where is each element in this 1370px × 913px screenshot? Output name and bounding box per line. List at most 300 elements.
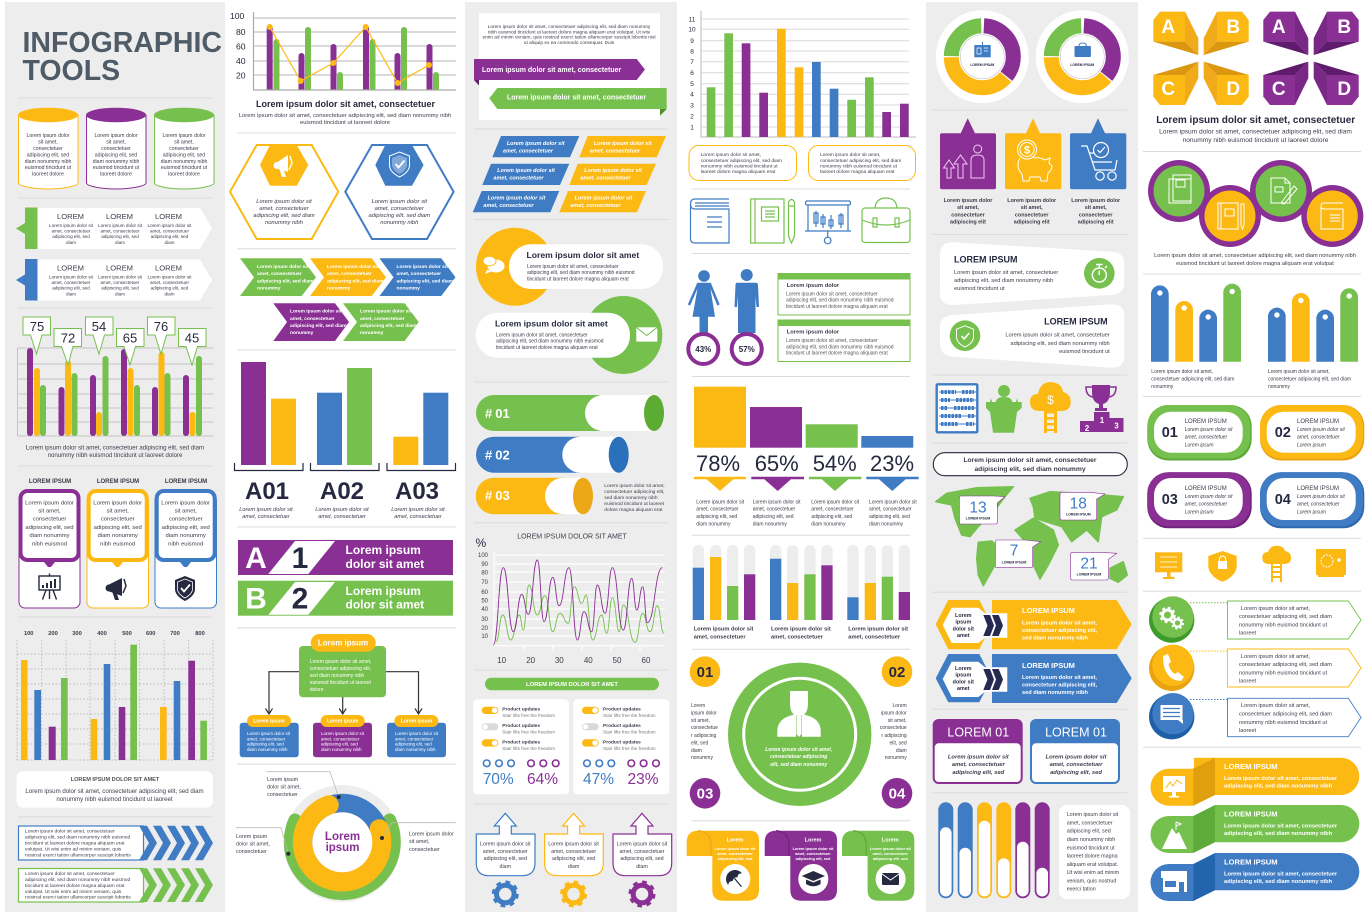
chevron process: adipiscing elit, sed diam xyxy=(257,278,314,284)
toggle card 1: Product updates xyxy=(502,723,540,729)
title cards: Lorem ipsum dolor sit xyxy=(1046,754,1108,760)
speech cards: diam nonummy xyxy=(98,533,138,539)
hex arrow: blue: sed diam nonummy nibh xyxy=(1022,690,1088,696)
chevron process: nonummy xyxy=(327,286,351,292)
donut chart: consectetuer xyxy=(409,847,440,853)
icon: monitor chart xyxy=(1163,776,1185,798)
title cards: LOREM 01 xyxy=(1045,726,1107,740)
bubble card: green: Lorem ipsum dolor sit amet xyxy=(495,318,608,328)
circle note: chat xyxy=(1149,693,1361,739)
line chart: 70 xyxy=(481,580,489,586)
combo chart: 60 xyxy=(236,42,246,52)
arrow banner: green: amet, consectetuer xyxy=(150,229,189,234)
step bars with percentages: amet, consectetuer xyxy=(869,507,912,513)
circle note: chat: nonummy nibh euismod tincidunt ut xyxy=(1239,720,1327,726)
cylinders: euismod tincidunt ut xyxy=(25,165,72,171)
gauge note: Lorem ipsum dolor sit xyxy=(1067,812,1119,818)
line chart: 50 xyxy=(613,656,622,665)
icon: book xyxy=(690,199,729,243)
parallelogram tags: Lorem ipsum dolor sit xyxy=(488,196,547,202)
hex arrow: yellow: amet xyxy=(957,633,970,639)
org chart xyxy=(240,634,446,757)
title cards xyxy=(933,719,1120,784)
circle note: gears: nonummy nibh euismod tincidunt ut xyxy=(1239,622,1327,628)
folded card: yellow: Lorem ipsum dolor sit xyxy=(715,846,756,851)
speech cards: Lorem ipsum dolor xyxy=(25,500,74,506)
ribbon: green: Lorem ipsum dolor sit amet, consectetuer xyxy=(1224,823,1338,829)
hex arrow: blue xyxy=(936,654,1132,703)
step bars with percentages: Lorem ipsum dolor sit xyxy=(696,500,745,506)
org chart: Lorem ipsum dolor sit xyxy=(321,731,365,736)
toggle card 2: Product updates xyxy=(603,739,641,745)
ribbon intro card: Lorem ipsum dolor sit amet, consectetuer xyxy=(482,67,622,74)
bubble card: green: adipiscing elit, sed diam nonummy nibh euismod xyxy=(496,339,604,345)
arrow banner: blue: LOREM xyxy=(57,264,84,272)
speech cards: nibh euismod xyxy=(168,541,203,547)
chevron process: amet, consectetuer xyxy=(257,271,302,277)
speech cards: sit amet, xyxy=(107,508,129,514)
description: nonummy nibh euismod tincidunt ut laoreet dolore xyxy=(1183,137,1329,144)
cylinders: euismod tincidunt ut xyxy=(93,165,140,171)
folded card: purple xyxy=(765,831,837,901)
banner B2: B xyxy=(245,583,267,616)
cylinders: adipiscing elit, sed xyxy=(95,152,137,158)
world map xyxy=(936,487,1127,586)
parallelogram tags: amet, consectetuer xyxy=(590,148,641,154)
bar chart 1-11: 5 xyxy=(690,81,694,88)
icon: trophy podium: 2 xyxy=(1085,424,1090,433)
numbered pills: Lorem ipsum dolor sit xyxy=(1185,494,1233,500)
central person graphic: 04 xyxy=(889,786,906,803)
central person graphic xyxy=(690,656,912,809)
circle note: chat: Lorem ipsum dolor sit amet, xyxy=(1241,703,1310,709)
icon: shield lock xyxy=(1208,551,1237,582)
combo chart: 80 xyxy=(236,27,246,37)
step bars with percentages: diam nonummy xyxy=(753,521,787,527)
speech cards: sit amet, xyxy=(38,508,61,514)
info boxes: Lorem ipsum dolor xyxy=(787,330,840,336)
pin bars: nonummy xyxy=(1268,384,1290,390)
numbered pills: Lorem ipsum xyxy=(1297,510,1326,516)
central person graphic: Lorem xyxy=(893,703,907,709)
info boxes: Lorem ipsum dolor xyxy=(787,283,840,289)
people stats: 57% xyxy=(739,345,755,354)
hexagon: yellow: Lorem ipsum dolor sit xyxy=(256,199,312,205)
combo chart: 20 xyxy=(236,70,246,80)
circle note: gears: consectetuer adipiscing elit, sed diam xyxy=(1239,614,1332,620)
hex arrow: blue: Lorem ipsum dolor sit amet, xyxy=(1022,675,1097,681)
gauge note: Ut wisi enim ad minim xyxy=(1067,870,1120,876)
central person graphic: elit, sed xyxy=(889,740,907,746)
ribbon: yellow xyxy=(1150,757,1359,806)
progress bars xyxy=(693,545,910,641)
folded card: purple: amet, consectetuer xyxy=(795,851,831,856)
numbered pills: 01 xyxy=(1162,425,1178,441)
banner B2: Lorem ipsum xyxy=(346,584,421,598)
speech cards: adipiscing elit, sed xyxy=(25,525,74,531)
central person graphic: Lorem xyxy=(691,703,705,709)
line chart: 10 xyxy=(497,656,507,665)
dotted bar chart 100-800: 400 xyxy=(97,631,107,637)
central person graphic: nonummy xyxy=(691,755,713,761)
note: stopwatch: LOREM IPSUM xyxy=(954,254,1018,264)
numbered pills: 04 xyxy=(1275,492,1291,508)
line chart: 80 xyxy=(481,570,489,576)
progress bars: amet, consectetuer xyxy=(694,635,746,641)
donut 1: LOREM IPSUM xyxy=(970,63,994,67)
org chart: amet, consectetuer xyxy=(247,736,286,741)
arrow banner: green: adipiscing elit, sed xyxy=(151,234,189,239)
parallelogram tags: amet, consectetuer xyxy=(570,203,621,209)
step bars with percentages: adipiscing elit, sed xyxy=(869,514,910,520)
step bars with percentages: adipiscing elit, sed xyxy=(753,514,794,520)
info boxes: tincidunt ut laoreet dolore magna aliquam erat xyxy=(786,351,888,357)
gauge note: adipiscing elit, sed xyxy=(1067,828,1111,834)
cylinders: consectetuer xyxy=(33,146,63,152)
donut chart: Lorem ipsum dolor xyxy=(409,832,454,838)
outline pill heading xyxy=(933,453,1127,476)
icon tiles: sit amet, xyxy=(1021,205,1043,211)
speech cards: LOREM IPSUM xyxy=(165,479,207,485)
icon: trophy podium xyxy=(1080,385,1124,433)
note: shield xyxy=(940,304,1124,368)
gauge note xyxy=(1059,805,1130,899)
ABCD purple: A xyxy=(1272,17,1286,38)
cylinders 01 02 03: # xyxy=(485,488,493,503)
panel: column 2 xyxy=(230,11,456,902)
bar chart with value callouts: 76 xyxy=(154,319,168,334)
gauge note: veniam, quis nostrud xyxy=(1067,878,1116,884)
central person graphic: consectetuer adipiscing xyxy=(770,754,827,760)
central person graphic: sit amet, xyxy=(888,718,907,724)
org chart: consectetuer adipiscing elit, xyxy=(310,666,371,672)
description: Lorem ipsum dolor sit amet, consectetuer adipiscing elit, sed diam xyxy=(1159,128,1352,136)
toggle card 2: Product updates xyxy=(603,706,641,712)
pin bars: nonummy xyxy=(1151,384,1174,390)
note boxes: Lorem ipsum dolor sit amet, xyxy=(820,152,880,158)
icon: umbrella xyxy=(722,866,748,892)
donut chart: ipsum xyxy=(326,842,359,854)
arrow cards with gears: amet, consectetuer xyxy=(619,849,665,855)
grouped bars A01 A02 A03: Lorem ipsum dolor sit xyxy=(391,507,445,513)
arrow cards with gears: amet, consectetuer xyxy=(483,849,528,855)
folded card: green: amet, consectetuer xyxy=(873,851,909,856)
bubble card: green xyxy=(476,296,662,374)
toggle card 1: Product updates xyxy=(502,739,540,745)
icon tiles: consectetuer xyxy=(1079,212,1113,218)
step bars with percentages: 23% xyxy=(870,451,914,476)
chevron box: blue: nostrud exerci tation ullamcorper suscipit lobortis xyxy=(25,852,131,858)
toggle card 1: Stair lifts free the freedom xyxy=(502,713,555,718)
icon tiles: Lorem ipsum dolor xyxy=(1071,198,1121,204)
hex arrow: blue: ipsum xyxy=(955,673,971,679)
icon: mountain flag xyxy=(1162,822,1187,849)
icon: presentation chart xyxy=(805,201,851,244)
donut chart: dolor sit amet, xyxy=(236,842,270,848)
circle note: phone xyxy=(1149,645,1361,691)
icon tiles xyxy=(940,118,1126,226)
arrow banner: blue: amet, consectetuer xyxy=(150,280,189,285)
combo chart xyxy=(230,11,456,90)
arrow banner: green: adipiscing elit, sed xyxy=(52,234,90,239)
note: stopwatch: Lorem ipsum dolor sit amet, consectetuer xyxy=(954,270,1058,276)
banner A1: Lorem ipsum xyxy=(346,543,421,557)
icon: megaphone xyxy=(106,578,126,600)
chart note: nonummy nibh euismod tincidunt ut laoreet xyxy=(56,796,173,803)
chart caption: nonummy nibh euismod tincidunt ut laoreet dolore xyxy=(48,452,183,459)
chevron box: blue xyxy=(18,826,213,860)
world map: 13 xyxy=(969,500,987,516)
line chart: 90 xyxy=(481,562,489,568)
dotted bar chart 100-800: 200 xyxy=(48,631,58,637)
grouped bars A01 A02 A03: amet, consectetuer xyxy=(318,514,367,520)
numbered pills: Lorem ipsum dolor sit xyxy=(1297,494,1345,500)
arrow banner: blue: adipiscing elit, sed xyxy=(151,286,189,290)
icon: growth person xyxy=(944,145,984,178)
bubble card: yellow: tincidunt ut laoreet dolore magna aliquam erat xyxy=(527,276,629,282)
note: stopwatch: euismod tincidunt ut xyxy=(954,286,1005,292)
cylinders: euismod tincidunt ut xyxy=(161,165,208,171)
heading: Lorem ipsum dolor sit amet, consectetuer xyxy=(256,99,436,109)
ribbon intro card: enim ad minim veniam, quis nostrud exerci tation ullamcorper suscipit lobortis nisl xyxy=(482,34,656,40)
world map: 7 xyxy=(1010,542,1018,560)
arrow banner: green: LOREM xyxy=(57,212,84,221)
description: Lorem ipsum dolor sit amet, consectetuer adipiscing elit, sed diam nonummy nibh xyxy=(239,113,451,119)
progress bars: Lorem ipsum dolor sit xyxy=(848,626,908,632)
step bars with percentages: diam nonummy xyxy=(811,521,846,527)
speech cards: LOREM IPSUM xyxy=(29,479,71,485)
chevron process: nonummy xyxy=(396,286,420,292)
cylinders 01 02 03: 02 xyxy=(495,448,510,462)
world map: LOREM IPSUM xyxy=(1077,572,1101,576)
folded card: purple: Lorem ipsum dolor sit xyxy=(793,846,834,851)
ribbon: yellow: LOREM IPSUM xyxy=(1224,762,1278,771)
chevron box: blue: tincidunt ut laoreet dolore magna aliquam erat xyxy=(25,840,125,846)
central person graphic: ipsum dolor xyxy=(881,710,907,716)
note: stopwatch: adipiscing elit, sed diam nonummy nibh xyxy=(954,278,1053,284)
cylinders: Lorem ipsum dolor xyxy=(95,133,138,139)
line chart: 20 xyxy=(481,626,489,632)
grouped bars A01 A02 A03: amet, consectetuer xyxy=(242,514,291,520)
org chart: adipiscing elit, sed xyxy=(247,742,284,746)
step bars with percentages: 78% xyxy=(696,451,740,476)
cylinders: sit amet, xyxy=(106,140,126,146)
donut chart: dolor sit amet, xyxy=(267,784,301,790)
arrow cards with gears xyxy=(476,813,672,905)
arrow banner: blue: adipiscing elit, sed xyxy=(52,286,90,290)
org chart: sed diam nonummy nibh xyxy=(310,673,364,679)
bubble card: yellow: adipiscing elit, sed diam nonummy nibh euismod xyxy=(527,270,635,276)
note boxes xyxy=(689,146,916,180)
chevron process: nonummy xyxy=(257,286,281,292)
ABCD yellow xyxy=(1153,12,1249,105)
circle note: chat: laoreet xyxy=(1239,728,1257,734)
note: shield: Lorem ipsum dolor sit amet, consectetuer xyxy=(1005,332,1110,338)
step bars with percentages: diam nonummy xyxy=(696,521,731,527)
chart note: LOREM IPSUM DOLOR SIT AMET xyxy=(71,777,160,783)
hex arrow: yellow: sed diam nonummy nibh xyxy=(1022,635,1088,641)
hexagon: blue: nonummy nibh xyxy=(380,220,418,226)
green header pill: LOREM IPSUM DOLOR SIT AMET xyxy=(526,682,618,688)
step bars with percentages: adipiscing elit, sed xyxy=(696,514,737,520)
step bars with percentages: 65% xyxy=(755,451,799,476)
numbered pills: LOREM IPSUM xyxy=(1185,419,1227,425)
cylinders 01 02 03: Lorem ipsum dolor sit amet, xyxy=(604,483,665,489)
bar chart 1-11: 1 xyxy=(690,124,694,131)
world map: 18 xyxy=(1070,496,1087,512)
org chart: adipiscing elit, sed xyxy=(395,742,432,746)
hex arrow: yellow: Lorem ipsum dolor sit amet, xyxy=(1022,620,1097,626)
combo chart: 40 xyxy=(236,56,246,66)
speech cards: adipiscing elit, sed xyxy=(94,525,142,531)
ribbon: yellow: Lorem ipsum dolor sit amet, consectetuer xyxy=(1224,776,1338,782)
arrow cards with gears: adipiscing elit, sed xyxy=(552,856,595,862)
ribbon: blue: adipiscing elit, sed diam nonummy nibh xyxy=(1224,879,1333,885)
note boxes: nonummy nibh euismod tincidunt ut xyxy=(820,164,898,170)
folded card: yellow: amet, consectetuer xyxy=(717,851,753,856)
numbered pills: 02 xyxy=(1275,425,1291,441)
info boxes: adipiscing elit, sed diam nonummy nibh euismod xyxy=(786,344,894,350)
cylinders: sit amet, xyxy=(38,140,58,146)
gauge note: aliquam erat volutpat. xyxy=(1067,862,1118,868)
bar chart 1-11: 8 xyxy=(690,48,694,55)
toggle card 2: Stair lifts free the freedom xyxy=(603,730,656,734)
arrow banner: green: LOREM xyxy=(106,212,133,221)
chart note: Lorem ipsum dolor sit amet, consectetuer adipiscing elit, sed diam xyxy=(25,788,204,795)
numbered pills: amet, consectetuer xyxy=(1297,435,1340,441)
dotted bar chart 100-800: 600 xyxy=(146,631,155,637)
icon: cloud ladder xyxy=(1030,382,1071,433)
note boxes: consectetuer adipiscing elit, sed diam xyxy=(701,158,782,164)
org chart: Lorem ipsum xyxy=(253,718,285,724)
numbered pills: Lorem ipsum xyxy=(1297,442,1326,448)
numbered pills: Lorem ipsum dolor sit xyxy=(1185,427,1233,433)
chevron box: green: nostrud exerci tation ullamcorper suscipit lobortis xyxy=(25,894,131,900)
folded card: green xyxy=(842,831,914,901)
pin bars: consectetuer adipiscing elit, sed diam xyxy=(1151,376,1234,382)
parallelogram tags: amet, consectetuer xyxy=(580,176,631,182)
gauge note: diam nonummy nibh xyxy=(1067,837,1115,843)
central person graphic: nonummy xyxy=(885,755,907,761)
arrow banner: blue: Lorem ipsum dolor sit xyxy=(98,274,143,280)
cylinders: diam nonummy nibh xyxy=(25,159,71,165)
cylinders 01 02 03: # xyxy=(485,406,493,421)
chevron process: Lorem ipsum dolor sit xyxy=(327,264,379,270)
central person graphic: 03 xyxy=(697,786,713,803)
arrow cards with gears: diam xyxy=(636,864,648,870)
bubble card: green: tincidunt ut laoreet dolore magna aliquam erat xyxy=(496,345,598,351)
banner A1 xyxy=(238,540,453,575)
arrow banner: green: adipiscing elit, sed xyxy=(101,234,139,239)
central person graphic: elit, sed xyxy=(691,740,708,746)
chevron box: green: adipiscing elit, sed diam nonummy nibh euismod xyxy=(25,877,130,883)
org chart: Lorem ipsum xyxy=(401,718,433,724)
numbered pills: amet, consectetuer xyxy=(1185,435,1228,441)
gauge note: amet, consectetuer xyxy=(1067,820,1113,826)
arrow banner: green xyxy=(16,208,212,249)
numbered pills: Lorem ipsum xyxy=(1185,510,1214,516)
hexagon: yellow xyxy=(230,145,338,239)
panel: column 5 xyxy=(926,2,1138,912)
cylinders: Lorem ipsum dolor xyxy=(163,133,206,139)
cylinders 01 02 03: 03 xyxy=(495,488,510,503)
arrow banner: blue xyxy=(16,259,212,300)
step bars with percentages: Lorem ipsum dolor sit xyxy=(753,500,801,506)
speech cards: consectetuer xyxy=(101,517,135,523)
arrow cards with gears: diam xyxy=(500,864,512,870)
people stats: 43% xyxy=(695,345,711,354)
bubble card: green: Lorem ipsum dolor sit amet, consectetuer xyxy=(496,332,588,338)
icon: megaphone xyxy=(274,155,292,177)
ABCD purple: B xyxy=(1337,17,1351,38)
bubble card: yellow: Lorem ipsum dolor sit amet xyxy=(526,250,639,260)
toggle card 2: 47% xyxy=(583,771,614,788)
progress bars: amet, consectetuer xyxy=(848,635,901,641)
pin bars xyxy=(1151,284,1358,390)
speech cards: nibh euismod xyxy=(100,541,135,547)
chevron box: green: Lorem ipsum dolor sit amet, consectetuer xyxy=(25,871,115,877)
line chart: 40 xyxy=(584,656,593,665)
outline pill heading: adipiscing elit, sed diam nonummy xyxy=(974,466,1086,473)
central person graphic: Lorem ipsum dolor sit amet, xyxy=(765,747,832,753)
hexagon: blue xyxy=(345,145,454,239)
chevron process: amet, consectetuer xyxy=(360,316,405,322)
ribbon: green: adipiscing elit, sed diam nonummy nibh xyxy=(1224,831,1333,837)
hex arrow: yellow: LOREM IPSUM xyxy=(1022,606,1075,615)
bubble card: yellow: Lorem ipsum dolor sit amet, consectetuer xyxy=(527,264,619,270)
progress bars: Lorem ipsum dolor sit xyxy=(771,626,831,632)
banner A1: 1 xyxy=(292,542,308,575)
chevron process: Lorem ipsum dolor sit xyxy=(396,264,448,270)
cylinders 01 02 03: consectetuer adipiscing elit, xyxy=(604,489,664,495)
linked circles xyxy=(1148,160,1363,247)
icon: piggy bank xyxy=(1018,140,1052,181)
icon: notebook pencil xyxy=(1218,203,1244,229)
bar chart with value callouts: 45 xyxy=(185,330,199,346)
numbered pills: Lorem ipsum xyxy=(1185,442,1214,448)
speech cards: consectetuer xyxy=(33,517,66,523)
progress bars: Lorem ipsum dolor sit xyxy=(694,626,754,632)
hex arrow: blue: Lorem xyxy=(955,666,972,672)
arrow banner: green: Lorem ipsum dolor sit xyxy=(98,223,143,228)
parallelogram tags: Lorem ipsum dolor sit xyxy=(575,196,634,202)
speech cards xyxy=(19,479,216,608)
toggle card 1: 70% xyxy=(483,771,514,788)
hexagon: yellow: adipiscing elit, sed diam xyxy=(253,213,315,219)
central person graphic: diam xyxy=(896,748,907,754)
ABCD purple: C xyxy=(1272,79,1286,100)
cylinders 01 02 03 xyxy=(476,395,665,514)
numbered pills: Lorem ipsum dolor sit xyxy=(1297,427,1345,433)
line chart: LOREM IPSUM DOLOR SIT AMET xyxy=(517,534,627,540)
chevron process: adipiscing elit, sed diam xyxy=(396,278,454,284)
toggle card 2: Stair lifts free the freedom xyxy=(603,713,656,718)
icon: businessman xyxy=(777,691,821,737)
numbered pills: LOREM IPSUM xyxy=(1297,419,1339,425)
chevron process: Lorem ipsum dolor sit xyxy=(290,308,342,314)
chevron process: amet, consectetuer xyxy=(396,271,441,277)
folded card: green: Lorem ipsum dolor sit xyxy=(870,846,911,851)
arrow banner: green: diam xyxy=(115,240,125,245)
circle note: gears xyxy=(1149,596,1361,643)
cylinders: consectetuer xyxy=(101,146,131,152)
arrow banner: blue: LOREM xyxy=(106,264,133,272)
arrow banner: green: amet, consectetuer xyxy=(51,229,91,234)
panel: column 4 xyxy=(687,11,919,901)
circle note: gears: Lorem ipsum dolor sit amet, xyxy=(1241,606,1310,612)
arrow banner: green: Lorem ipsum dolor sit xyxy=(49,223,94,228)
parallelogram tags: amet, consectetuer xyxy=(483,203,534,209)
